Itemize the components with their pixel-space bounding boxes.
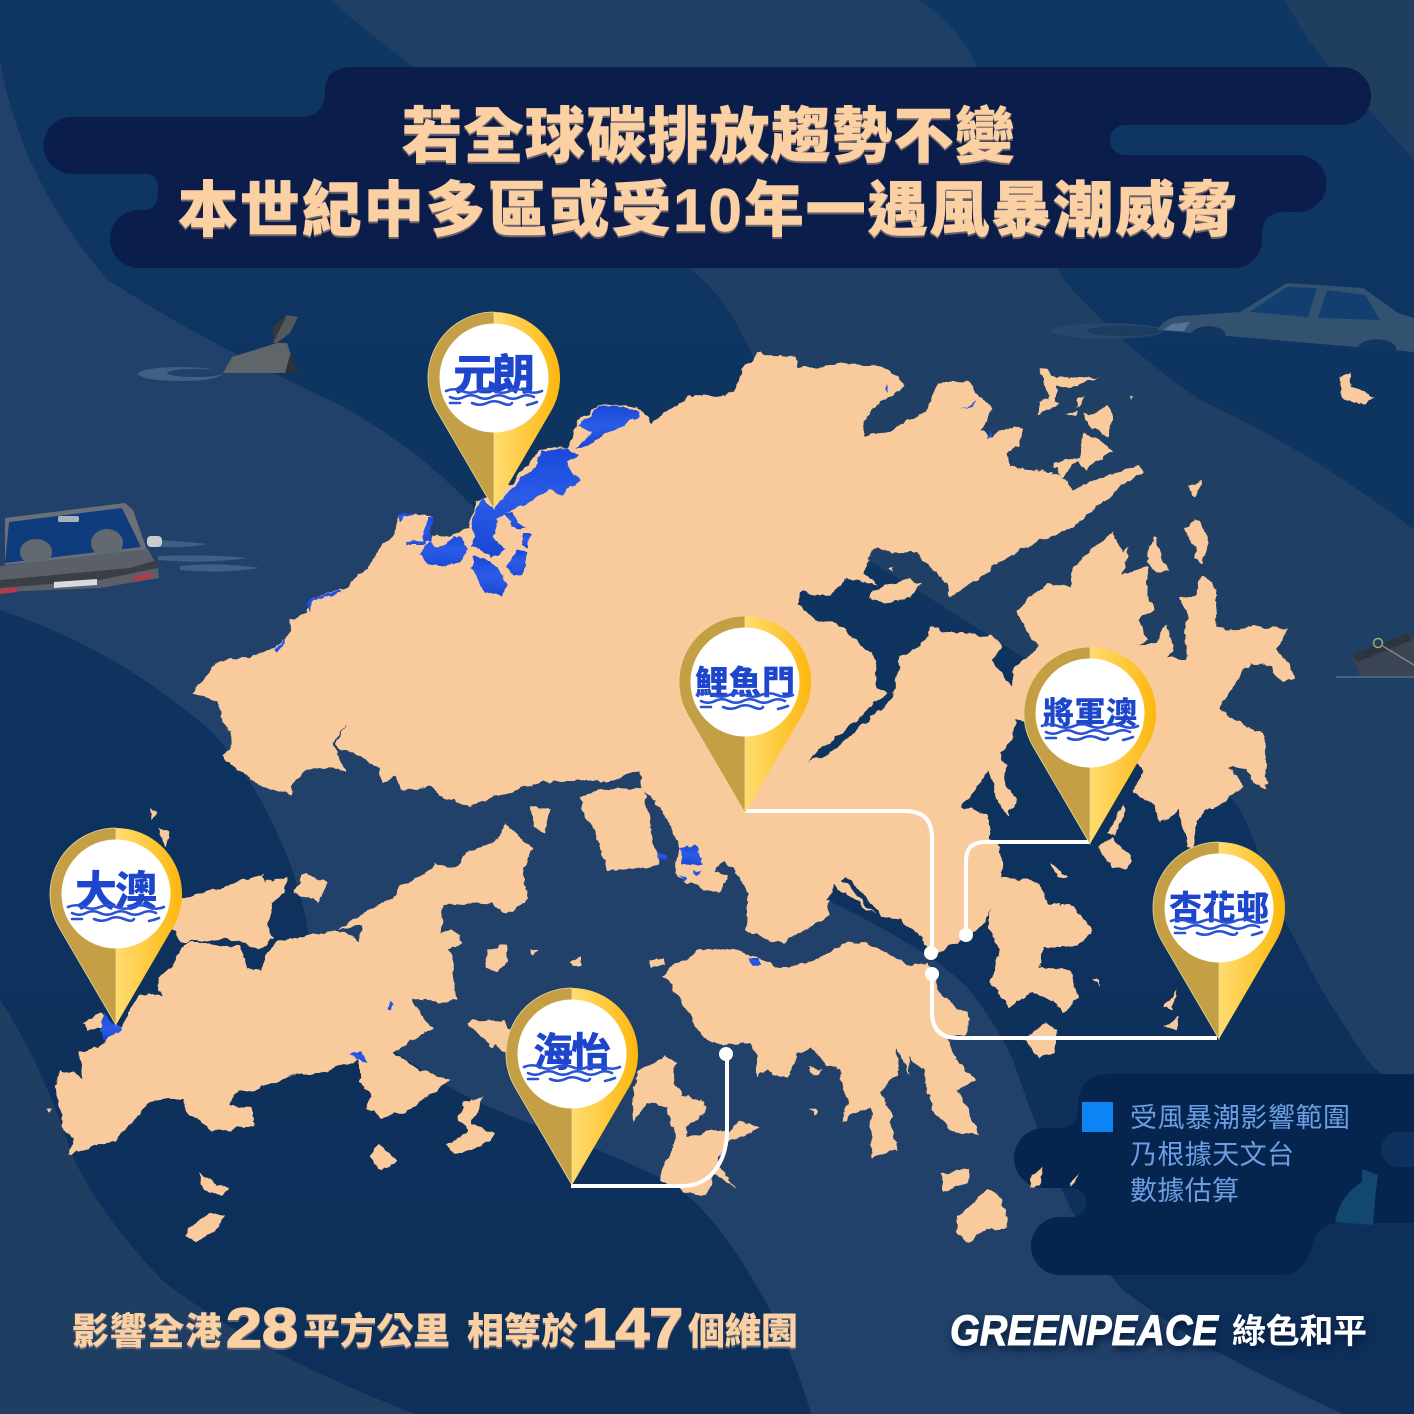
Ma Wan bbox=[530, 807, 550, 833]
title: 若全球碳排放趨勢不變 bbox=[402, 103, 1015, 170]
bottom statistic: 相等於 bbox=[467, 1311, 578, 1352]
title: 本世紀中多區或受10年一遇風暴潮威脅 bbox=[178, 177, 1237, 244]
pin: Tseung Kwan O bbox=[1024, 647, 1156, 844]
Tsing Yi bbox=[582, 788, 660, 870]
outlying islands bbox=[45, 368, 1375, 1243]
illustration: sunken boat right bbox=[1336, 633, 1414, 677]
map of Hong Kong bbox=[45, 353, 1375, 1243]
legend text: 乃根據天文台 bbox=[1130, 1140, 1294, 1170]
Tai O bbox=[83, 1013, 107, 1030]
illustration: submerged bag bbox=[138, 315, 298, 381]
bottom statistic: 個維園 bbox=[688, 1311, 798, 1352]
pin: South Horizons: 海怡 bbox=[533, 1031, 611, 1075]
pin: Yuen Long bbox=[428, 312, 560, 509]
title bbox=[178, 103, 1237, 244]
storm surge flood areas bbox=[101, 384, 992, 1063]
title banner bbox=[43, 67, 1371, 268]
pin: Heng Fa Chuen bbox=[1153, 842, 1285, 1039]
Greenpeace logo: 綠色和平 bbox=[1232, 1313, 1367, 1351]
Lamma Island bbox=[632, 1057, 758, 1195]
Greenpeace logo: GREENPEACE bbox=[950, 1307, 1219, 1355]
pin: Tai O bbox=[50, 828, 182, 1025]
bottom statistic: 平方公里 bbox=[303, 1310, 450, 1352]
connector lines bbox=[571, 811, 1217, 1186]
pin: Yuen Long: 元朗 bbox=[453, 352, 535, 400]
bottom statistic: 28 bbox=[226, 1296, 298, 1359]
pin: Lei Yue Mun: 鯉魚門 bbox=[695, 664, 795, 701]
legend text: 數據估算 bbox=[1130, 1176, 1239, 1206]
Chek Lap Kok airport island bbox=[170, 875, 287, 948]
legend panel bbox=[1014, 1074, 1414, 1275]
bottom statistic: 影響全港 bbox=[72, 1310, 222, 1352]
legend text: 受風暴潮影響範圍 bbox=[1130, 1103, 1350, 1133]
legend swatch bbox=[1082, 1102, 1113, 1132]
illustration: submerged car left bbox=[0, 503, 260, 594]
legend text bbox=[1130, 1103, 1350, 1206]
pin: Tseung Kwan O: 將軍澳 bbox=[1043, 696, 1137, 731]
icon: plastic bottle bbox=[1335, 1169, 1378, 1225]
New Territories and Kowloon bbox=[192, 353, 1295, 1012]
Lantau Island bbox=[55, 823, 533, 1155]
pin: South Horizons bbox=[506, 988, 638, 1185]
bottom statistic: 147 bbox=[582, 1296, 683, 1359]
bottom statistic bbox=[72, 1296, 798, 1359]
pin: Heng Fa Chuen: 杏花邨 bbox=[1169, 889, 1269, 926]
Hong Kong Island bbox=[663, 942, 980, 1158]
illustration: flooded sedan top right bbox=[1052, 283, 1414, 352]
pin: Tai O: 大澳 bbox=[75, 868, 157, 915]
pin: Lei Yue Mun bbox=[679, 616, 811, 813]
